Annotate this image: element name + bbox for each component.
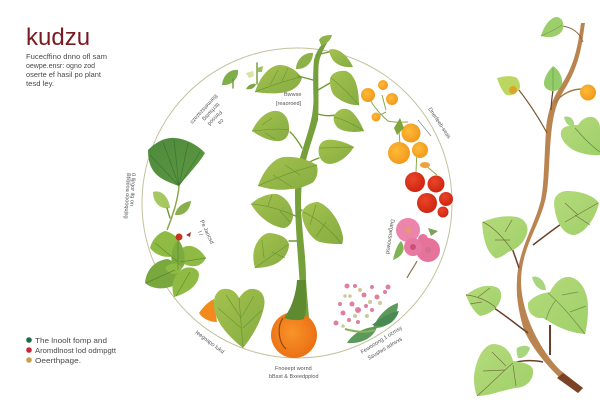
vine leaf: clipped top: [533, 191, 599, 245]
central plant leaves: [251, 35, 364, 268]
pink flower cluster: [393, 218, 440, 278]
vine leaf: top: [541, 17, 583, 42]
label: top centre: Bwwse: [284, 92, 301, 98]
intro text block: Fucecffino dnno ofl sam: [26, 54, 107, 61]
legend: Oeerthpage.: [35, 356, 81, 365]
label: cluster: Pe Jaocsd: [198, 219, 214, 245]
intro text block: [26, 54, 107, 88]
vine stem: [517, 23, 585, 393]
label: lower right: Fewooong 1 ozmsy: [360, 325, 404, 356]
leaf: left mid: [252, 111, 289, 141]
orange fruit: [271, 280, 317, 358]
label: right arc: Dnerfeeb-seas: [426, 107, 452, 140]
label: top centre: [276, 92, 302, 107]
vine leaf: big right: [528, 277, 588, 355]
right vine: [466, 17, 600, 396]
label: top left: Ftmsod: [206, 109, 223, 126]
label: bottom centre: [269, 366, 319, 380]
lifecycle circle: [142, 48, 452, 358]
leaf: broad centre: [258, 157, 318, 190]
leaf: right mid: [334, 109, 364, 132]
leaf: right lower: [319, 140, 354, 164]
top small seedlings: [222, 63, 263, 89]
vine leaf: bottom: [474, 344, 543, 396]
intro text block: tesd ley.: [26, 81, 54, 88]
leaf: lower left: [251, 194, 293, 228]
vine orange bud: [555, 84, 596, 103]
red tomatoes: [405, 172, 453, 218]
label: left arc: 0 lljrgor ifg on: [128, 173, 136, 206]
leaf: right upper: [330, 71, 359, 105]
central vine stem: [293, 41, 327, 318]
vine leaf: left lower: [466, 286, 528, 333]
vine leaf: left upper: [482, 216, 528, 268]
leaf: lower right: [302, 202, 343, 244]
leaf: bottom left: [253, 233, 289, 268]
label: top left: Barmetszazazs: [189, 93, 218, 125]
label: left arc: Bfldeoa ooooqujsg: [123, 173, 131, 219]
label: top left: ttcrfsutsg: [201, 101, 220, 122]
label: top left: ca: [216, 117, 225, 126]
legend: The lnoolt fomp and: [35, 336, 107, 345]
label: lower left: Ieegnapo lukd: [194, 330, 225, 355]
heart-shaped leaf with orange wedge: [199, 289, 265, 348]
orange berries: [361, 80, 437, 175]
legend: [26, 336, 117, 365]
label: bottom centre: Fnoeept wornd: [275, 366, 312, 372]
intro text block: oewpe.ensr: ogno zod: [26, 63, 95, 70]
leaf: upper left large: [255, 65, 302, 93]
vine leaf: middle with stalk: [544, 66, 562, 110]
label: cluster: l /: [196, 230, 204, 237]
label: bottom centre: bBsst & Bxeedpplod: [269, 374, 319, 380]
label: flower: Dargetsnowsd: [384, 219, 395, 254]
leaf cluster with red buds: [145, 231, 206, 297]
label: top left: [189, 93, 234, 139]
leaf: top right: [329, 49, 353, 67]
title: kudzu: [26, 24, 90, 51]
label: lower right: Ssuslws adrwxs: [367, 336, 404, 362]
legend: Aromdlnost lod odmpgtt: [35, 346, 117, 355]
lower flowering plant: [334, 284, 399, 343]
label: left arc: [123, 173, 136, 219]
intro text block: oserte ef hasil po plant: [26, 72, 101, 79]
circle labels: [123, 92, 452, 380]
dark green leaf: [148, 138, 205, 230]
vine leaf: yellow: [497, 76, 547, 133]
leaf: top small: [296, 53, 313, 69]
vine leaf: right top: [561, 117, 600, 155]
label: top centre: [reaoroed]: [276, 101, 302, 107]
